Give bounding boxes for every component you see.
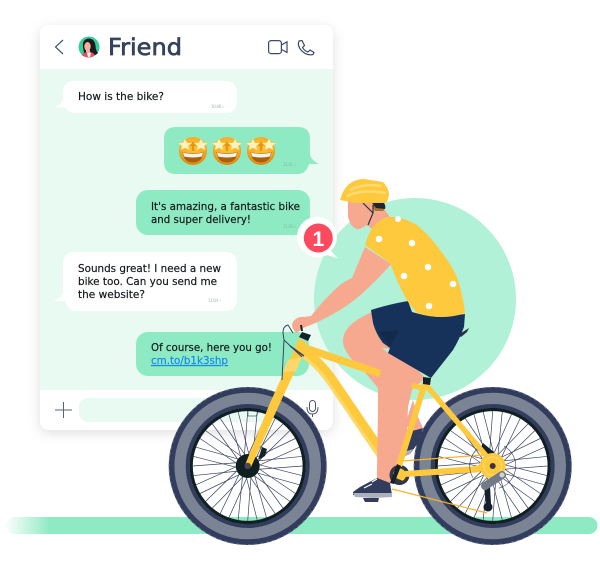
message: How is the bike: How is the bike? [78, 91, 164, 103]
derailleur pulley [484, 502, 492, 512]
cleat [363, 498, 379, 502]
icon: microphone [307, 400, 318, 417]
derailleur body [485, 475, 502, 486]
helmet strap band [372, 203, 385, 209]
laces [364, 479, 377, 488]
message: It's amazing: It's amazing, a fantastic bike [151, 201, 300, 213]
helmet [340, 179, 389, 203]
front wheel [169, 387, 326, 545]
front shoe [353, 478, 392, 502]
ground strip [5, 517, 598, 534]
rear cassette [470, 443, 516, 489]
fork tip [244, 463, 251, 469]
icon: attachment [248, 409, 260, 416]
crank arm [390, 464, 401, 484]
heading: Friend: Friend [108, 35, 182, 61]
icon: friend avatar [78, 36, 100, 58]
front brake [258, 447, 267, 460]
bike frame [244, 325, 516, 513]
message: emoji reaction: 11:01 ✓ [283, 162, 297, 167]
front hub [236, 454, 260, 478]
message: Of course with link [136, 332, 309, 376]
icon: star-struck emoji [212, 137, 242, 165]
input bar: text field [79, 398, 295, 422]
chainring [390, 465, 410, 485]
message: How is the bike: 10:48 ✓ [211, 104, 225, 109]
head tube and fork [245, 338, 308, 467]
arm [292, 247, 391, 333]
brake lever [290, 346, 304, 356]
message: It's amazing [136, 190, 310, 235]
icon: star-struck emoji [246, 137, 276, 165]
icon: star-struck emoji [178, 137, 208, 165]
message: emoji reaction [164, 127, 319, 174]
top tube [307, 345, 381, 377]
helmet strap [363, 203, 373, 225]
message: Sounds great: the website? [78, 289, 145, 301]
fork highlight [283, 357, 302, 372]
rear wheel [414, 387, 571, 545]
saddle [458, 328, 469, 337]
seat stay [426, 385, 488, 458]
derailleur dot [500, 472, 504, 478]
message: Of course with link: Of course, here you go! [151, 342, 272, 354]
neck and head [348, 200, 392, 236]
panel: chat window [40, 25, 333, 430]
message: Of course with link: cm.to/b1k3shp [151, 355, 228, 367]
message: Sounds great: Sounds great! I need a new [78, 263, 221, 275]
chain stay [405, 452, 497, 477]
chain [392, 455, 487, 513]
message: Sounds great: bike too. Can you send me [78, 276, 217, 288]
message: Sounds great [54, 252, 237, 311]
shorts fold [379, 330, 399, 347]
background circle [314, 198, 516, 400]
shoe sole [353, 493, 392, 498]
rider [292, 179, 465, 484]
input bar: plus icon [55, 402, 72, 418]
jersey [365, 216, 465, 317]
icon: phone [298, 40, 314, 55]
seat post [423, 377, 431, 385]
stem [299, 332, 311, 341]
notification badge: 1 [312, 228, 324, 251]
hair [372, 205, 384, 211]
message: Sounds great: 11:04 ✓ [208, 298, 222, 303]
rear derailleur arm [481, 443, 495, 504]
notification badge [297, 217, 338, 258]
message: It's amazing: 11:02 ✓ [283, 224, 297, 229]
message: How is the bike [54, 81, 237, 113]
icon: video camera [269, 41, 287, 54]
seat tube [399, 383, 425, 466]
shorts [371, 301, 465, 378]
header: back chevron [56, 40, 63, 54]
chat background [40, 69, 333, 390]
brake cables [282, 325, 302, 380]
seat clamp piece [411, 383, 426, 391]
gap under shorts [382, 348, 390, 353]
thumb [301, 325, 302, 331]
bike: down tube [302, 350, 396, 474]
message: It's amazing: and super delivery! [151, 214, 251, 226]
rear leg and shoe [400, 400, 423, 458]
leg [343, 312, 425, 484]
